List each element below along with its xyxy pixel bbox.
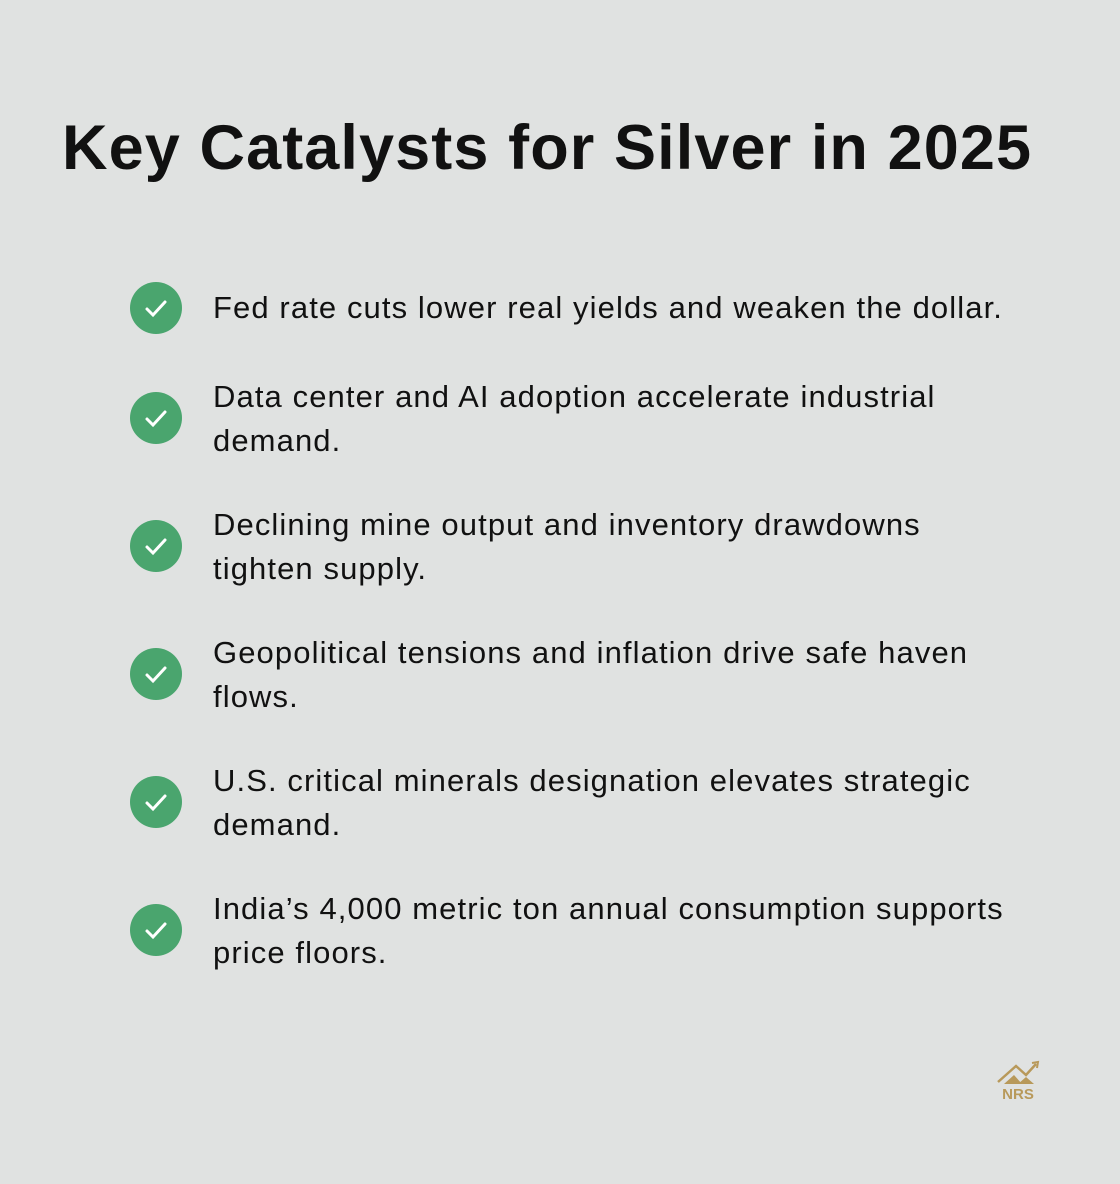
text — [213, 635, 968, 714]
text: demand. — [213, 807, 341, 842]
text — [213, 507, 921, 586]
logo: NRS — [997, 1060, 1040, 1102]
icon: check — [130, 392, 182, 444]
text: India’s 4,000 metric ton annual consumption supports — [213, 891, 1004, 926]
text: Geopolitical tensions and inflation drive safe haven — [213, 635, 968, 670]
icon: check — [130, 282, 182, 334]
text: tighten supply. — [213, 551, 427, 586]
icon: check — [130, 776, 182, 828]
text: Declining mine output and inventory drawdowns — [213, 507, 921, 542]
icon: check — [130, 904, 182, 956]
item 3 — [130, 507, 921, 586]
text: flows. — [213, 679, 299, 714]
text: Data center and AI adoption accelerate industrial — [213, 379, 936, 414]
item 2 — [130, 379, 936, 458]
text — [213, 763, 971, 842]
item 1 — [130, 282, 1003, 334]
item 6 — [130, 891, 1004, 970]
item 4 — [130, 635, 968, 714]
icon: check — [130, 520, 182, 572]
text — [213, 891, 1004, 970]
text: Fed rate cuts lower real yields and weaken the dollar. — [213, 290, 1003, 325]
text: U.S. critical minerals designation elevates strategic — [213, 763, 971, 798]
item 5 — [130, 763, 971, 842]
text: price floors. — [213, 935, 388, 970]
text — [213, 379, 936, 458]
icon: check — [130, 648, 182, 700]
title: Key Catalysts for Silver in 2025 — [62, 113, 1032, 183]
text: demand. — [213, 423, 341, 458]
